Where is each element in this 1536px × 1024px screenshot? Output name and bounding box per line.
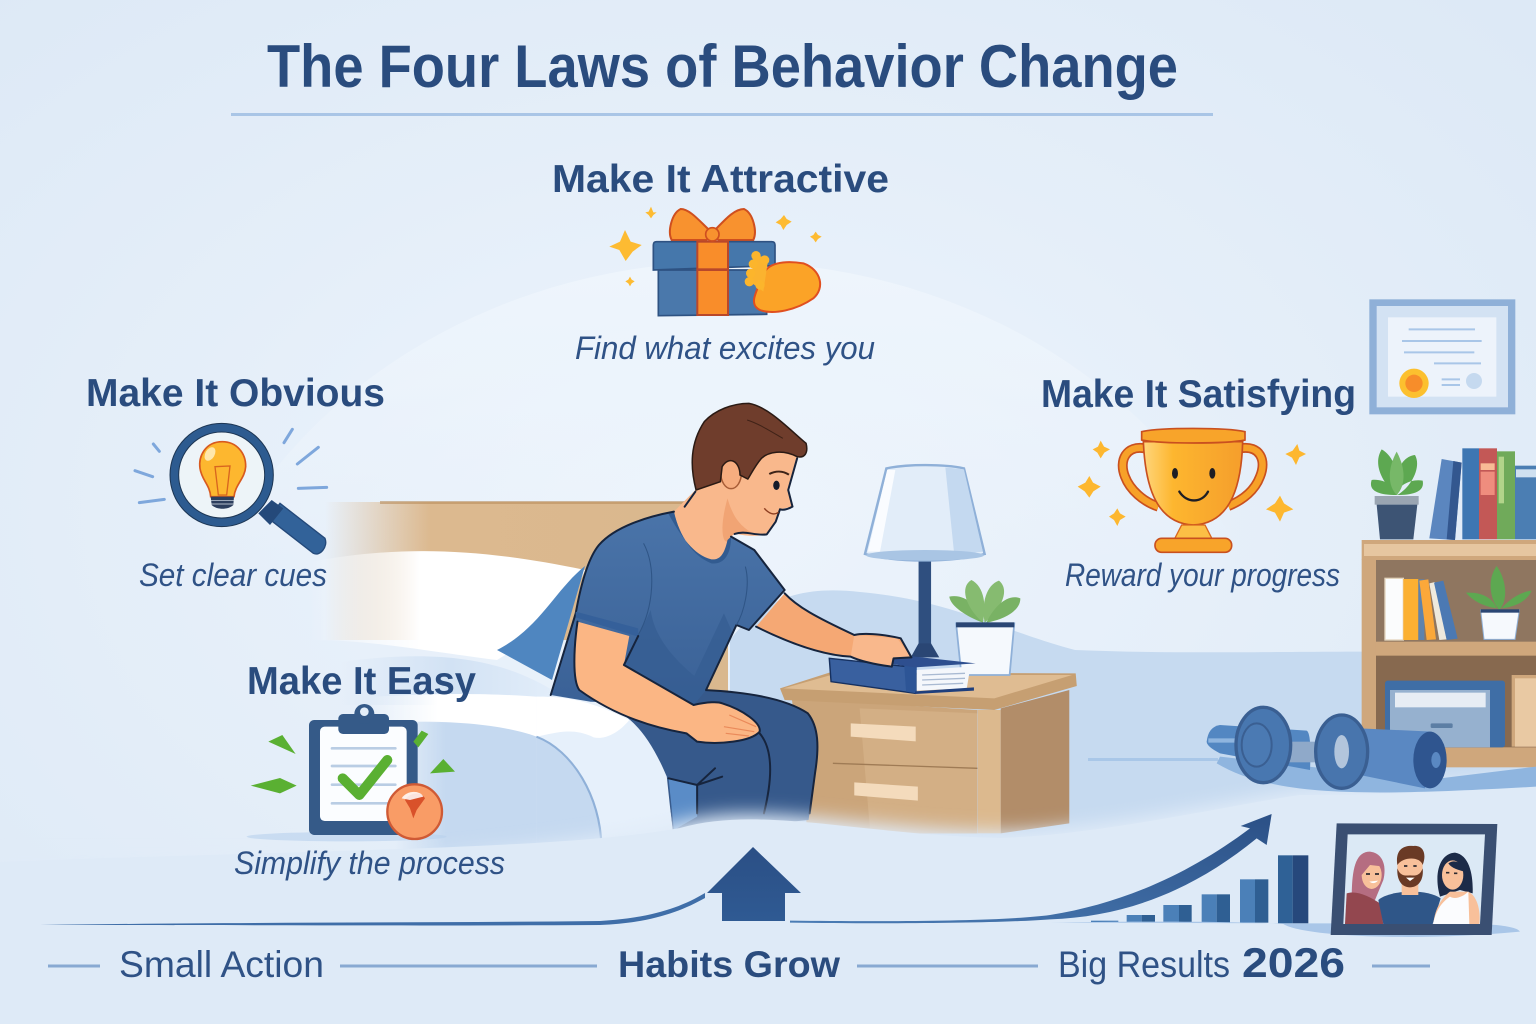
bed headboard: [325, 502, 700, 640]
icon: magnifier with light bulb: [135, 423, 327, 554]
hair: [692, 403, 807, 490]
caption: Set clear cues: [139, 557, 327, 593]
photo frame shadow: [1050, 922, 1520, 937]
white blanket band: [370, 694, 540, 738]
ear: [721, 457, 741, 489]
panel: make it obvious: [86, 372, 385, 593]
trousers: [626, 690, 817, 833]
shaded blanket fold: [340, 656, 560, 705]
person and furniture: [536, 403, 1218, 847]
woman right: [1437, 853, 1473, 897]
bed: [310, 501, 728, 850]
certificate: [1369, 299, 1515, 414]
orange badge: [387, 784, 442, 839]
icon: clipboard: [247, 704, 455, 841]
stars: [1078, 441, 1306, 526]
caption: Find what excites you: [575, 330, 875, 366]
floor wave foreground: [0, 770, 1536, 1024]
man: [536, 403, 976, 847]
panel: make it attractive: [552, 158, 889, 366]
nightstand: [780, 673, 1077, 833]
blue pillow: [497, 566, 585, 680]
heading: Make It Attractive: [552, 158, 889, 201]
panel: make it easy: [234, 660, 505, 881]
eye: [773, 481, 780, 490]
man centre: [1378, 892, 1441, 924]
label: small action: Small Action: [119, 944, 324, 985]
stars: [609, 230, 642, 261]
bookshelf: [1362, 540, 1536, 767]
icon: gift box: [609, 207, 822, 316]
icon: trophy: [1078, 428, 1306, 552]
green accents: [251, 731, 455, 793]
growth curve: small action: [40, 893, 705, 925]
dumbbell: [1207, 707, 1536, 792]
floor line: [1088, 758, 1218, 761]
lamp: [865, 465, 985, 657]
heading: Make It Satisfying: [1041, 373, 1356, 416]
top shelf books: [1429, 448, 1536, 540]
caption: Reward your progress: [1065, 557, 1340, 593]
title: The Four Laws of Behavior Change: [267, 33, 1178, 100]
book: [829, 658, 915, 693]
baseline connector lines: [48, 964, 1430, 968]
blanket front: [536, 697, 673, 847]
label: 2026: 2026: [1242, 939, 1345, 986]
photo frame: [1331, 823, 1497, 935]
arrow: habits grow up arrow: [707, 847, 801, 921]
smile: [764, 508, 779, 514]
bar chart: [1091, 855, 1308, 923]
top shelf plant: [1371, 449, 1423, 539]
label: big results: Big Results: [1058, 944, 1230, 985]
right side room objects: [1207, 299, 1536, 792]
shelf books: [1385, 578, 1403, 640]
label: habits grow: Habits Grow: [618, 944, 840, 985]
heading: Make It Easy: [247, 660, 476, 703]
woman left: [1352, 852, 1385, 900]
caption: Simplify the process: [234, 845, 505, 881]
headboard post: [700, 630, 728, 730]
blanket shadow area: [395, 722, 540, 850]
neck and face: [674, 447, 797, 560]
storage box: [1385, 681, 1505, 747]
t-shirt: [551, 512, 785, 705]
heading: Make It Obvious: [86, 372, 385, 415]
near arm: [574, 622, 760, 743]
white pillow: [310, 551, 585, 660]
icon: hand: [754, 262, 820, 312]
title underline: [231, 113, 1213, 116]
small plant on nightstand: [949, 580, 1020, 675]
extended arm: [756, 593, 911, 667]
growth arrow: [790, 814, 1520, 937]
panel: make it satisfying: [1041, 373, 1356, 593]
rays: [135, 429, 327, 503]
shelf plant: [1466, 566, 1532, 610]
